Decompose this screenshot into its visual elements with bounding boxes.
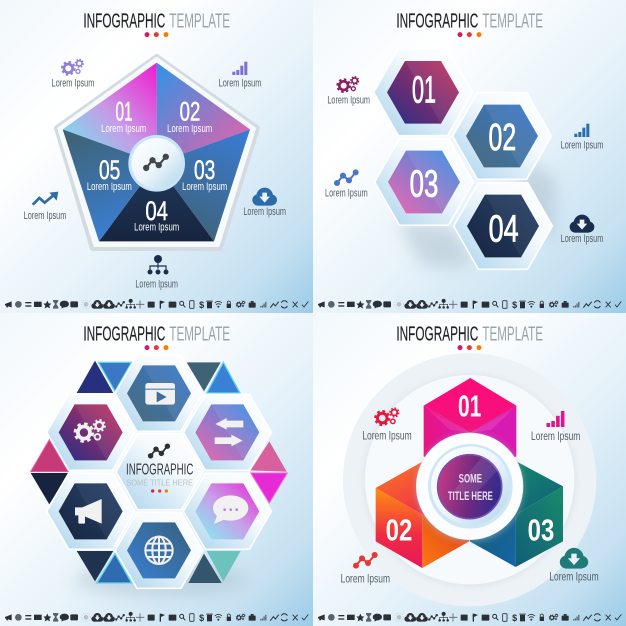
icon: gears with label: Lorem Ipsum	[327, 95, 370, 107]
segment labels: Lorem Ipsum	[87, 181, 132, 193]
segment labels: Lorem Ipsum	[101, 123, 146, 135]
center circle	[128, 135, 185, 192]
icon: bars with label: Lorem Ipsum	[561, 140, 603, 152]
center text	[126, 461, 193, 493]
icon: chat bubble	[213, 495, 248, 524]
center text: INFOGRAPHIC	[126, 461, 193, 478]
icon: cloud with label: Lorem Ipsum	[243, 206, 286, 218]
icon: gears with label: Lorem Ipsum	[52, 77, 94, 89]
icon: video window	[145, 383, 175, 405]
panel: cubes in circle	[313, 313, 626, 626]
panel: four hexagons	[313, 0, 626, 313]
segment labels: Lorem Ipsum	[182, 181, 227, 193]
cube 02: 02	[386, 514, 412, 548]
cube 03	[470, 461, 563, 567]
cube 02	[376, 461, 469, 568]
hexagon: upper left gears	[47, 394, 135, 470]
center badge: TITLE HERE	[448, 489, 493, 503]
hexagon: bottom globe	[115, 512, 203, 588]
segment labels: 05	[99, 155, 120, 185]
segment 2	[157, 63, 250, 163]
icon: hierarchy with label: Lorem Ipsum	[135, 278, 178, 290]
hexagon: upper right arrows	[183, 394, 271, 470]
title: TEMPLATE	[482, 323, 543, 345]
hexagon 03: 03	[410, 164, 438, 206]
title: INFOGRAPHIC	[83, 323, 165, 345]
title: INFOGRAPHIC	[396, 10, 478, 32]
icon: trend arrow with label	[24, 192, 66, 222]
icon: gears with label: Lorem Ipsum	[362, 429, 412, 443]
icon strip	[5, 299, 308, 310]
pentagon frame	[57, 57, 257, 248]
icon: bars with label	[561, 124, 603, 152]
icon: gears with label	[362, 408, 412, 443]
icon: cloud with label	[549, 548, 599, 584]
icon: swap arrows	[215, 418, 243, 446]
icon: gears with label	[327, 77, 370, 107]
title: INFOGRAPHIC	[396, 323, 478, 345]
title: TEMPLATE	[169, 323, 230, 345]
panel: pentagon infographic	[0, 0, 313, 313]
title: TEMPLATE	[482, 10, 543, 32]
hexagon 04: 04	[489, 209, 519, 251]
hexagon 02: 02	[488, 117, 516, 159]
segment 3	[157, 129, 250, 241]
hexagon 03	[375, 139, 473, 225]
icon: bars with label	[219, 62, 261, 90]
icon: bars with label: Lorem Ipsum	[531, 429, 580, 443]
icon: megaphone	[75, 499, 102, 524]
icon: nodes with label	[341, 552, 390, 585]
hexagon: top video	[115, 355, 203, 431]
icon: cloud with label	[243, 188, 286, 218]
segment labels: 02	[180, 97, 200, 127]
icon: gears with label	[52, 59, 94, 89]
hexagon 04	[454, 183, 552, 269]
cube 01: 01	[458, 389, 481, 423]
icon: cloud with label	[561, 215, 603, 245]
segment 1	[63, 63, 157, 163]
segment 5	[63, 129, 157, 241]
segment labels: Lorem Ipsum	[134, 222, 179, 234]
cube 03: 03	[528, 514, 554, 548]
icon strip	[318, 612, 621, 623]
segment labels: Lorem Ipsum	[167, 123, 212, 135]
segment 4	[99, 163, 214, 241]
hexagon 02	[453, 93, 551, 179]
icon: trend arrow with label: Lorem Ipsum	[24, 210, 66, 222]
hexagon 01: 01	[412, 70, 436, 112]
icon strip	[5, 612, 308, 623]
panel: hexagon ring	[0, 313, 313, 626]
inner ring	[364, 374, 576, 586]
segment labels	[87, 97, 227, 234]
icon: nodes with label	[325, 169, 368, 199]
icon: nodes	[148, 444, 170, 458]
icon: bars with label	[531, 411, 580, 443]
icon: nodes with label: Lorem Ipsum	[325, 187, 368, 199]
icon: bars with label: Lorem Ipsum	[219, 78, 261, 90]
icon strip	[318, 299, 621, 310]
title: TEMPLATE	[169, 10, 230, 32]
outer ring	[343, 353, 596, 606]
hexagon: lower left megaphone	[47, 473, 135, 549]
icon: cloud with label: Lorem Ipsum	[561, 233, 603, 245]
title: INFOGRAPHIC	[83, 10, 165, 32]
cube 01	[424, 378, 516, 480]
icon: globe	[145, 537, 173, 564]
icon: gears	[75, 420, 105, 441]
hexagon 01	[374, 49, 472, 136]
center text: SOME TITLE HERE	[126, 479, 193, 488]
icon: cloud with label: Lorem Ipsum	[549, 570, 599, 584]
center hexagon	[116, 434, 203, 510]
outer triangles	[31, 361, 287, 583]
center badge	[416, 433, 524, 542]
hexagon: lower right chat	[183, 473, 271, 549]
segment labels: 03	[194, 155, 215, 185]
center badge: SOME	[459, 472, 482, 486]
segment labels: 04	[145, 196, 168, 226]
segment labels: 01	[116, 97, 132, 127]
icon: hierarchy with label	[135, 255, 178, 290]
icon: center line chart	[143, 154, 169, 171]
icon: nodes with label: Lorem Ipsum	[341, 571, 390, 585]
